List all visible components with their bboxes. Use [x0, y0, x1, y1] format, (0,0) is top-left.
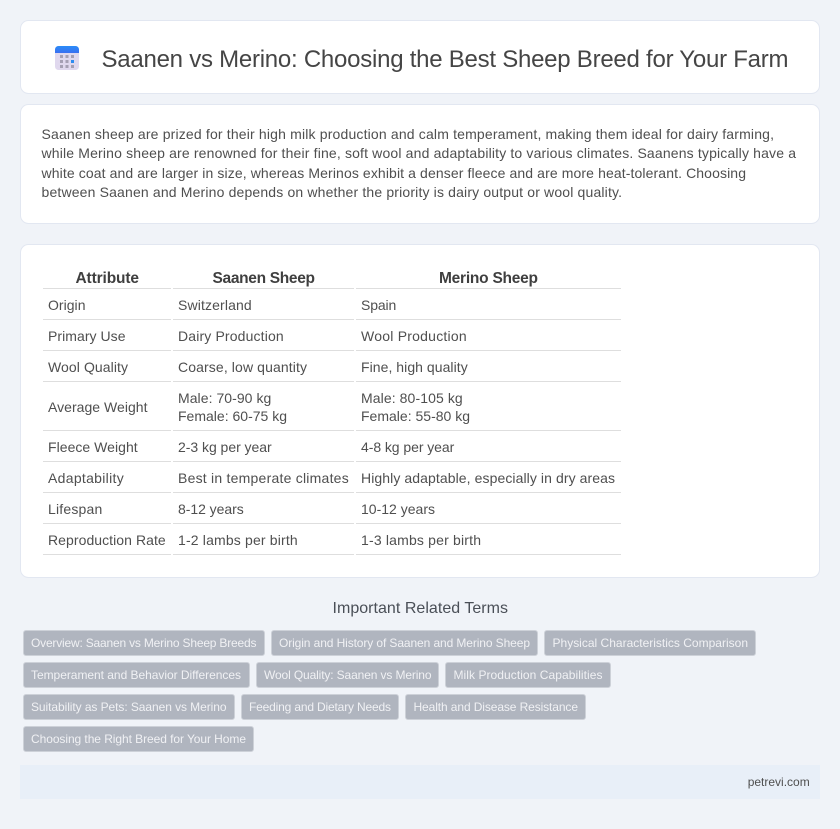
title: Saanen vs Merino: Choosing the Best Sheep Breed for Your Farm: [102, 46, 788, 73]
tag: [446, 662, 610, 688]
row: lifespan: 10-12 years: [361, 501, 435, 517]
panel: introduction: [20, 104, 820, 224]
tag: Feeding and Dietary Needs: [249, 700, 391, 714]
row: adaptability: [43, 470, 621, 493]
row: reproduction rate: Reproduction Rate: [48, 532, 166, 548]
intro paragraph: between Saanen and Merino depends on whether the priority is dairy output or wool quality.: [42, 184, 622, 200]
footer site name: petrevi.com: [748, 775, 810, 789]
tag: Milk Production Capabilities: [454, 668, 602, 682]
tag: [24, 630, 264, 656]
tag: Wool Quality: Saanen vs Merino: [264, 668, 432, 682]
row: origin: [43, 297, 621, 320]
panel: header: [20, 20, 820, 94]
tag: Choosing the Right Breed for Your Home: [31, 732, 246, 746]
tag: Physical Characteristics Comparison: [552, 636, 748, 650]
tag: [24, 726, 254, 752]
row: origin: Switzerland: [178, 297, 252, 313]
tag: Overview: Saanen vs Merino Sheep Breeds: [31, 636, 256, 650]
intro paragraph: [40, 126, 796, 200]
row: wool quality: Coarse, low quantity: [178, 359, 307, 375]
table header row: Attribute: [76, 270, 139, 287]
row: average weight: Male: 80-105 kg: [361, 390, 463, 406]
tag: [256, 662, 438, 688]
row: average weight: Average Weight: [48, 399, 148, 415]
row: reproduction rate: 1-3 lambs per birth: [361, 532, 481, 548]
panel: comparison table: [20, 244, 820, 578]
tag: Temperament and Behavior Differences: [31, 668, 241, 682]
row: primary use: Dairy Production: [178, 328, 284, 344]
tag list: [24, 630, 756, 752]
table header row: Merino Sheep: [439, 270, 538, 287]
tag: [272, 630, 538, 656]
row: adaptability: Highly adaptable, especially in dry areas: [361, 470, 615, 486]
row: reproduction rate: [43, 532, 621, 555]
row: lifespan: Lifespan: [48, 501, 102, 517]
tag: [242, 694, 398, 720]
tag: Suitability as Pets: Saanen vs Merino: [31, 700, 227, 714]
row: reproduction rate: 1-2 lambs per birth: [178, 532, 298, 548]
row: lifespan: 8-12 years: [178, 501, 244, 517]
row: primary use: Primary Use: [48, 328, 126, 344]
heading: important related terms: Important Related Terms: [332, 600, 508, 617]
row: fleece weight: Fleece Weight: [48, 439, 138, 455]
row: average weight: Female: 55-80 kg: [361, 408, 470, 424]
row: average weight: Female: 60-75 kg: [178, 408, 287, 424]
tag: [544, 630, 756, 656]
table header row: [43, 270, 621, 289]
table: [43, 270, 621, 555]
tag: Origin and History of Saanen and Merino Sheep: [279, 636, 530, 650]
row: wool quality: Wool Quality: [48, 359, 128, 375]
tag: Health and Disease Resistance: [414, 700, 578, 714]
row: primary use: Wool Production: [361, 328, 467, 344]
row: lifespan: [43, 501, 621, 524]
row: wool quality: [43, 359, 621, 382]
row: average weight: [43, 390, 621, 431]
tag: [24, 662, 250, 688]
footer: [20, 765, 820, 799]
row: origin: Origin: [48, 297, 86, 313]
intro paragraph: while Merino sheep are renowned for their fine, soft wool and adaptability to various climates. Saanens typically have a: [40, 145, 796, 161]
tag: [406, 694, 586, 720]
row: wool quality: Fine, high quality: [361, 359, 468, 375]
row: fleece weight: 4-8 kg per year: [361, 439, 455, 455]
tag: [24, 694, 234, 720]
row: origin: Spain: [361, 297, 396, 313]
row: primary use: [43, 328, 621, 351]
row: average weight: Male: 70-90 kg: [178, 390, 271, 406]
row: adaptability: Adaptability: [48, 470, 124, 486]
intro paragraph: white coat and are larger in size, whereas Merinos exhibit a denser fleece and are more heat-tolerant. Choosing: [40, 165, 746, 181]
table header row: Saanen Sheep: [212, 270, 315, 287]
intro paragraph: Saanen sheep are prized for their high milk production and calm temperament, making them ideal for dairy farming,: [42, 126, 774, 142]
row: adaptability: Best in temperate climates: [178, 470, 349, 486]
row: fleece weight: 2-3 kg per year: [178, 439, 272, 455]
row: fleece weight: [43, 439, 621, 462]
icon: calendar: [55, 46, 79, 70]
